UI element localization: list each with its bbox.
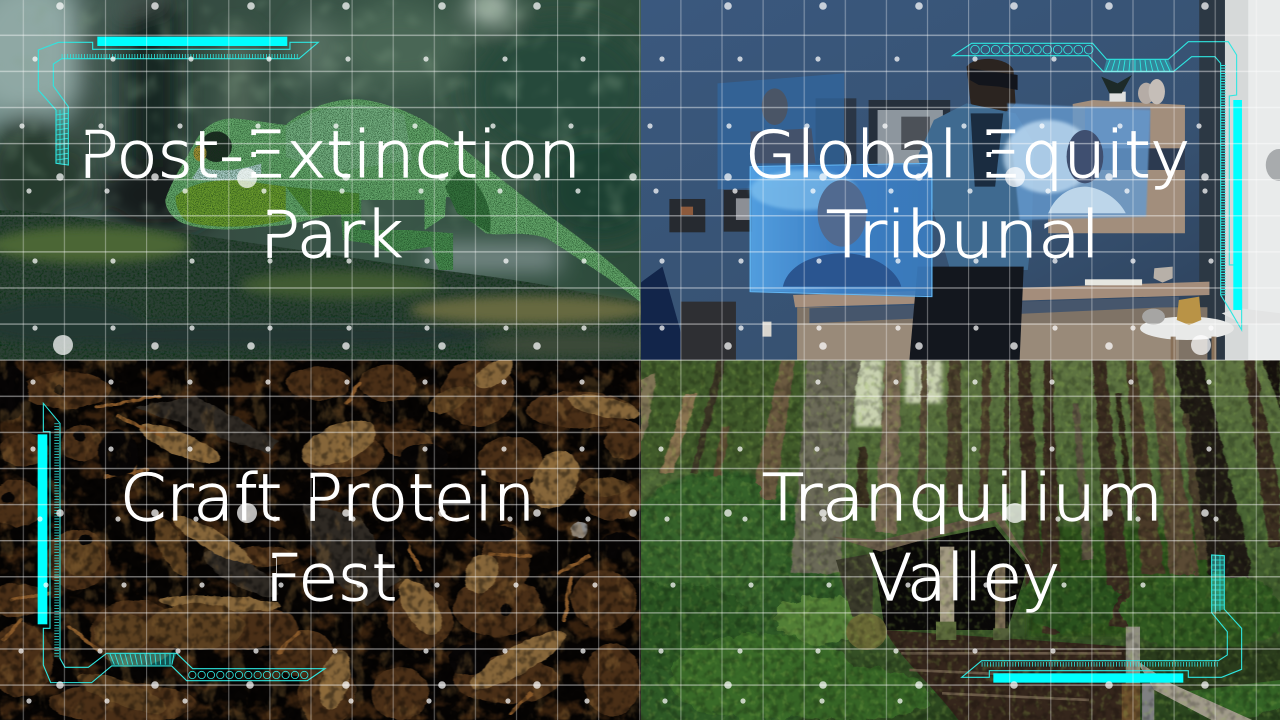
- title: Global Equity Tribunal: Global Equity: [745, 119, 1190, 193]
- photo: pile of roasted crickets: [0, 353, 645, 720]
- hud frame: top-right corner: [953, 42, 1242, 330]
- photo: forest cabin among tall trees: [591, 360, 1280, 720]
- title: Craft Protein Fest: Craft Protein: [120, 462, 535, 536]
- chameleon: [165, 99, 640, 302]
- photo: man in headset with holographic calls: [640, 0, 1280, 360]
- side tables: [1140, 317, 1234, 340]
- title: Post-Extinction Park: Post-Extinction: [78, 119, 581, 193]
- credenza: [793, 282, 1209, 307]
- hologram C: [1007, 103, 1150, 220]
- title: Tranquilium Valley: Tranquilium: [762, 462, 1163, 536]
- hologram A: [718, 73, 844, 189]
- title: Post-Extinction Park: Park: [260, 199, 403, 273]
- hud frame: bottom-left corner: [38, 403, 325, 683]
- hologram B: [750, 163, 932, 297]
- title: Global Equity Tribunal: Tribunal: [826, 199, 1100, 273]
- cabin: [873, 527, 1028, 630]
- panel: Craft Protein Fest: [0, 353, 645, 720]
- panel: Post-Extinction Park: [0, 0, 660, 360]
- photo: chameleon on a mossy branch: [0, 0, 660, 360]
- shelf: [1048, 100, 1185, 233]
- title: Tranquilium Valley: [762, 462, 1163, 616]
- sofa: [641, 266, 681, 360]
- panel: Global Equity Tribunal: [640, 0, 1280, 360]
- ground path: [885, 630, 1126, 720]
- hud frame: top-left corner: [38, 37, 318, 165]
- fence: [1126, 626, 1140, 684]
- foliage: [656, 475, 1280, 720]
- man: [967, 59, 1016, 113]
- wall frames: [869, 100, 950, 167]
- branch: [0, 210, 641, 360]
- hud frame: bottom-right corner: [962, 555, 1242, 683]
- title: Post-Extinction Park: [86, 127, 574, 259]
- title: Craft Protein Fest: Fest: [265, 542, 397, 616]
- title: Global Equity Tribunal: [750, 127, 1188, 259]
- right edge column and curtain: [1199, 0, 1226, 360]
- panel: Tranquilium Valley: [591, 360, 1280, 720]
- title: Craft Protein Fest: [124, 470, 529, 602]
- title: Tranquilium Valley: Valley: [868, 542, 1060, 616]
